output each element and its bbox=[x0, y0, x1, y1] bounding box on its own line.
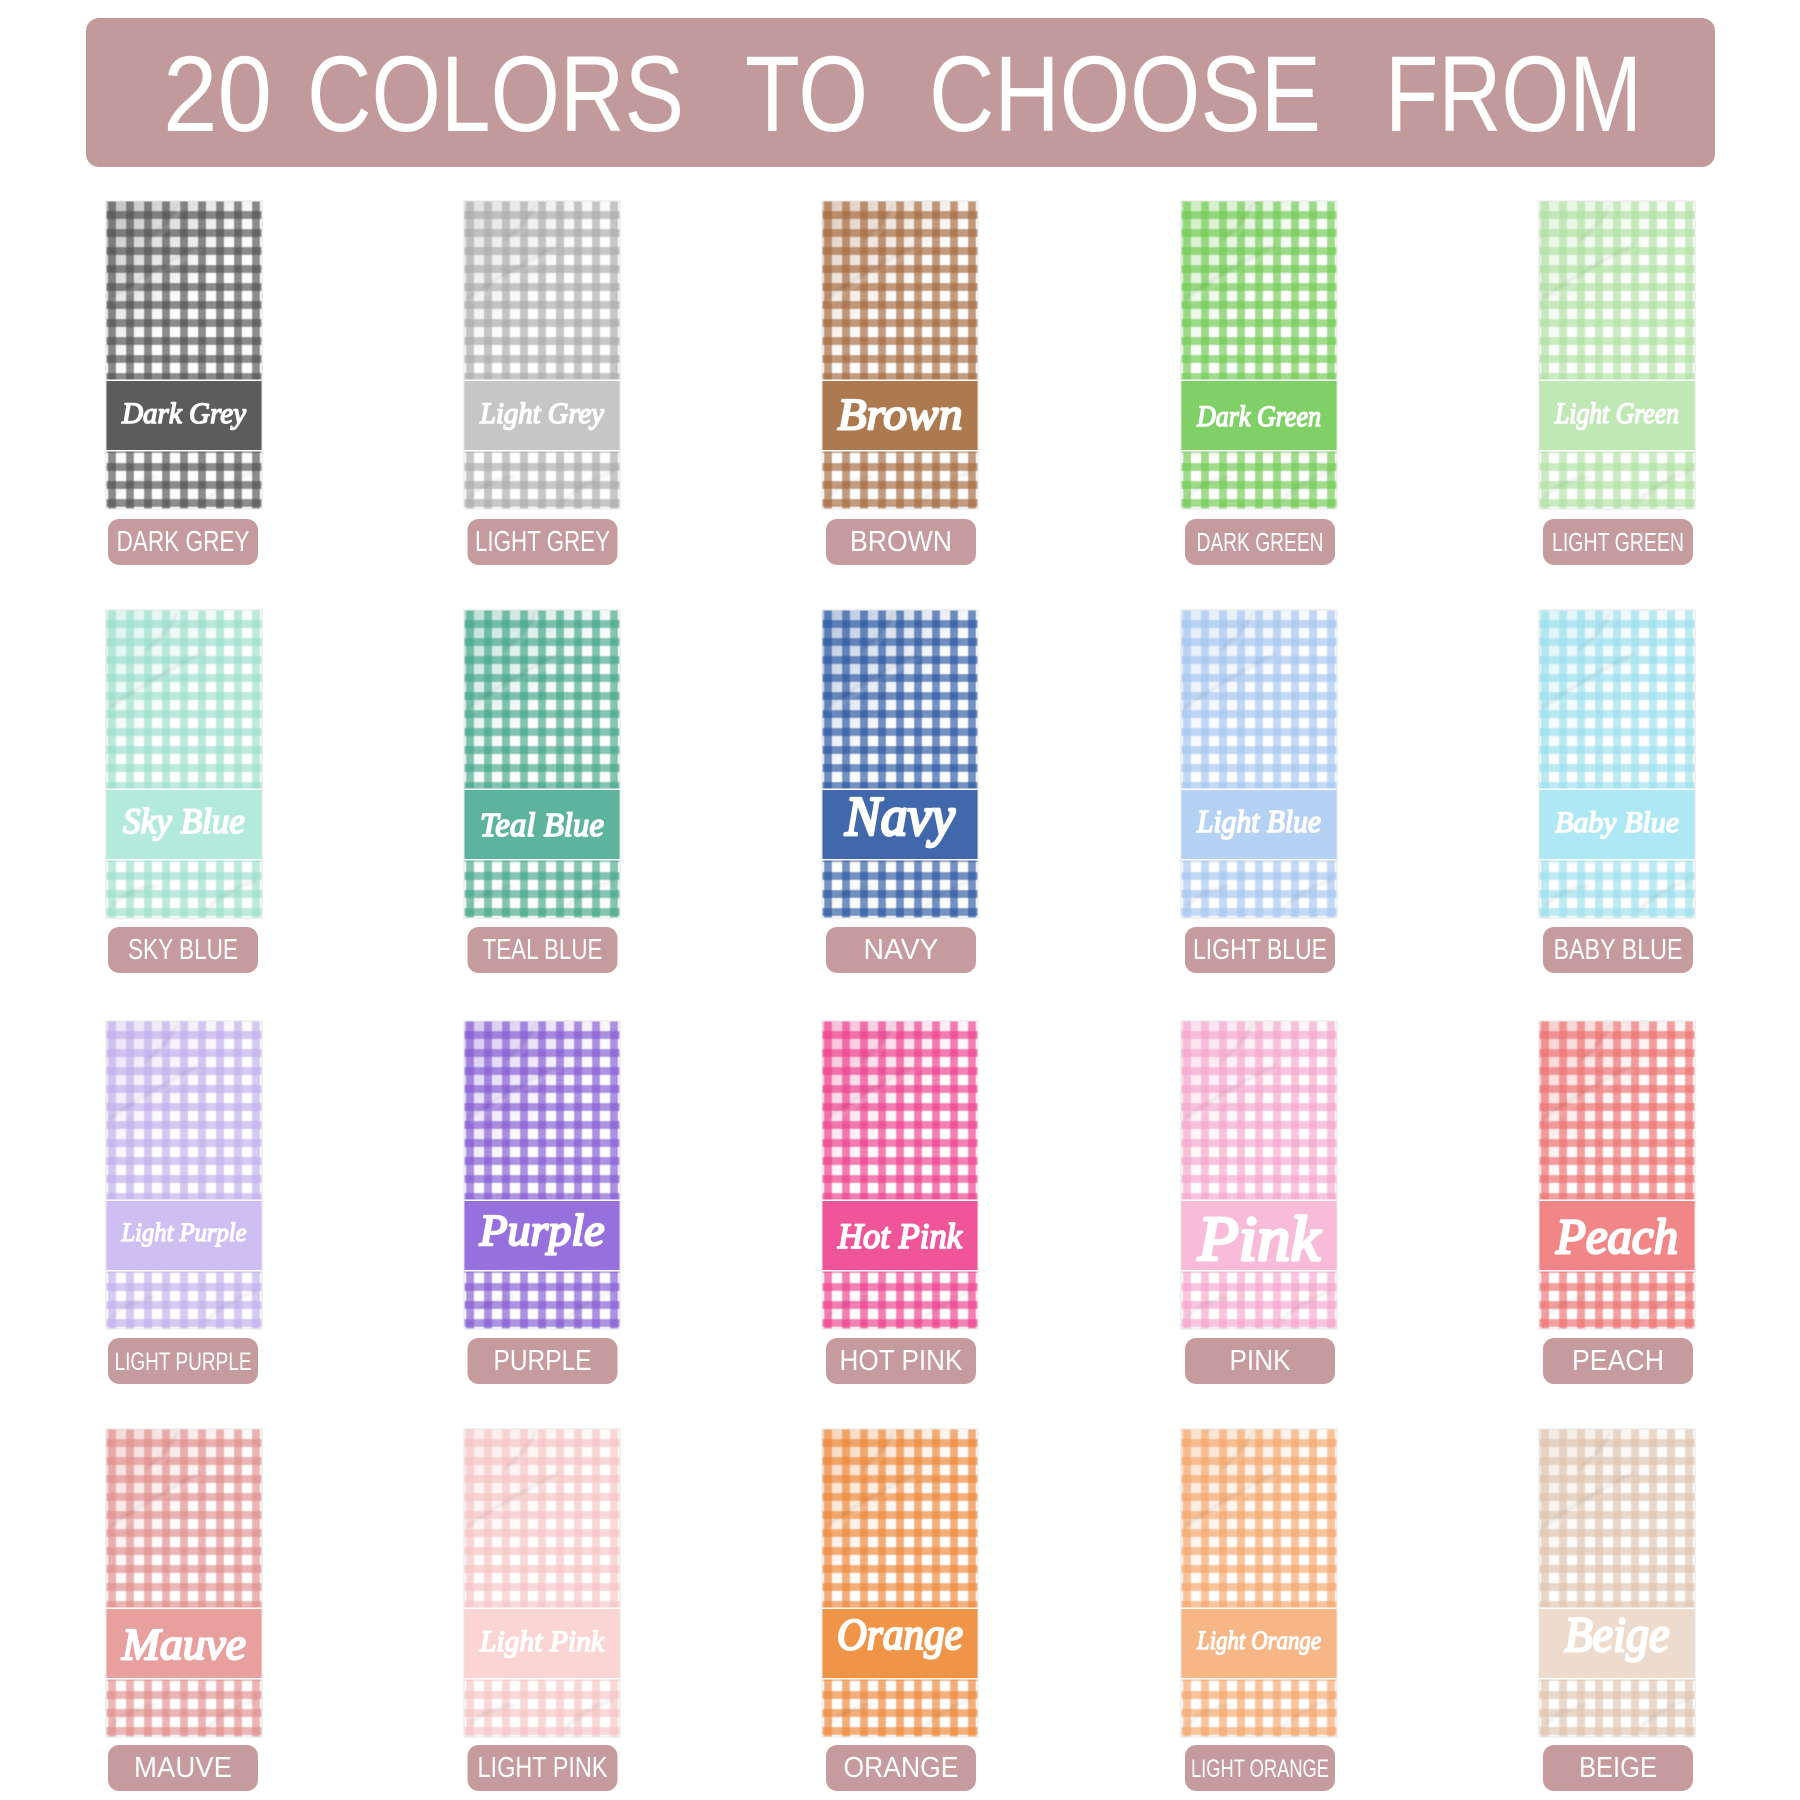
label: orange: ORANGE bbox=[844, 1752, 958, 1784]
label: beige: BEIGE bbox=[1579, 1752, 1657, 1784]
label: light grey bbox=[468, 519, 618, 565]
label: purple bbox=[468, 1338, 618, 1384]
towel: light green: Light Green bbox=[1554, 397, 1679, 430]
label: sky blue: SKY BLUE bbox=[128, 934, 238, 966]
label: light grey: LIGHT GREY bbox=[475, 526, 610, 558]
label: light blue bbox=[1185, 927, 1335, 973]
label: navy: NAVY bbox=[864, 934, 938, 966]
label: navy bbox=[826, 927, 976, 973]
towel: dark grey bbox=[106, 201, 262, 509]
towel: dark green: Dark Green bbox=[1196, 400, 1321, 433]
label: baby blue: BABY BLUE bbox=[1554, 934, 1682, 966]
towel: peach bbox=[1539, 1021, 1695, 1329]
towel: baby blue bbox=[1539, 610, 1695, 918]
towel: hot pink: Hot Pink bbox=[837, 1216, 963, 1256]
towel: dark grey: Dark Grey bbox=[121, 397, 247, 430]
towel: navy: Navy bbox=[844, 786, 955, 848]
label: light orange bbox=[1185, 1745, 1335, 1791]
towel: brown bbox=[822, 201, 978, 509]
label: dark green bbox=[1185, 519, 1335, 565]
towel: mauve: Mauve bbox=[121, 1620, 246, 1669]
label: mauve: MAUVE bbox=[134, 1752, 232, 1784]
towel: teal blue: Teal Blue bbox=[480, 807, 604, 844]
towel: purple bbox=[464, 1021, 620, 1329]
towel: brown: Brown bbox=[838, 390, 962, 439]
towel: beige: Beige bbox=[1564, 1606, 1670, 1662]
title banner: CHOOSE bbox=[929, 33, 1321, 154]
label: orange bbox=[826, 1745, 976, 1791]
towel: light pink: Light Pink bbox=[479, 1625, 605, 1658]
label: light blue: LIGHT BLUE bbox=[1193, 934, 1327, 966]
title banner: FROM bbox=[1385, 33, 1642, 154]
towel: baby blue: Baby Blue bbox=[1555, 806, 1679, 839]
label: hot pink bbox=[826, 1338, 976, 1384]
towel: light orange: Light Orange bbox=[1196, 1626, 1321, 1655]
towel: light grey bbox=[464, 201, 620, 509]
towel: light blue: Light Blue bbox=[1196, 803, 1321, 839]
label: peach: PEACH bbox=[1572, 1345, 1664, 1377]
label: teal blue bbox=[468, 927, 618, 973]
towel: light purple: Light Purple bbox=[121, 1218, 247, 1247]
label: sky blue bbox=[108, 927, 258, 973]
title banner: 20 bbox=[163, 33, 272, 154]
towel: peach: Peach bbox=[1555, 1208, 1678, 1264]
towel: orange: Orange bbox=[837, 1610, 963, 1659]
label: light pink: LIGHT PINK bbox=[478, 1752, 608, 1784]
towel: purple: Purple bbox=[478, 1206, 604, 1255]
towel: light purple bbox=[106, 1021, 262, 1329]
label: beige bbox=[1543, 1745, 1693, 1791]
label: teal blue: TEAL BLUE bbox=[482, 934, 602, 966]
label: light purple bbox=[108, 1338, 258, 1384]
towel: orange bbox=[822, 1429, 978, 1737]
towel: sky blue: Sky Blue bbox=[123, 801, 245, 841]
title banner bbox=[86, 18, 1715, 167]
label: dark green: DARK GREEN bbox=[1196, 527, 1324, 557]
title banner: COLORS bbox=[307, 33, 684, 154]
towel: teal blue bbox=[464, 610, 620, 918]
label: light green bbox=[1543, 519, 1693, 565]
label: light pink bbox=[468, 1745, 618, 1791]
towel: light pink bbox=[464, 1429, 620, 1737]
label: light green: LIGHT GREEN bbox=[1552, 527, 1684, 557]
label: pink bbox=[1185, 1338, 1335, 1384]
label: light orange: LIGHT ORANGE bbox=[1191, 1755, 1329, 1783]
label: dark grey bbox=[108, 519, 258, 565]
towel: light blue bbox=[1181, 610, 1337, 918]
label: mauve bbox=[108, 1745, 258, 1791]
title banner: TO bbox=[745, 33, 868, 154]
label: brown bbox=[826, 519, 976, 565]
label: hot pink: HOT PINK bbox=[840, 1345, 963, 1377]
towel: beige bbox=[1539, 1429, 1695, 1737]
towel: navy bbox=[822, 610, 978, 918]
towel: light green bbox=[1539, 201, 1695, 509]
label: baby blue bbox=[1543, 927, 1693, 973]
label: purple: PURPLE bbox=[494, 1345, 592, 1377]
towel: pink bbox=[1181, 1021, 1337, 1329]
towel: light grey: Light Grey bbox=[479, 397, 605, 430]
towel: pink: Pink bbox=[1197, 1203, 1322, 1274]
towel: hot pink bbox=[822, 1021, 978, 1329]
label: peach bbox=[1543, 1338, 1693, 1384]
towel: mauve bbox=[106, 1429, 262, 1737]
label: brown: BROWN bbox=[850, 526, 952, 558]
towel: dark green bbox=[1181, 201, 1337, 509]
label: light purple: LIGHT PURPLE bbox=[114, 1348, 252, 1376]
towel: sky blue bbox=[106, 610, 262, 918]
label: pink: PINK bbox=[1230, 1345, 1291, 1377]
label: dark grey: DARK GREY bbox=[116, 526, 250, 558]
towel: light orange bbox=[1181, 1429, 1337, 1737]
